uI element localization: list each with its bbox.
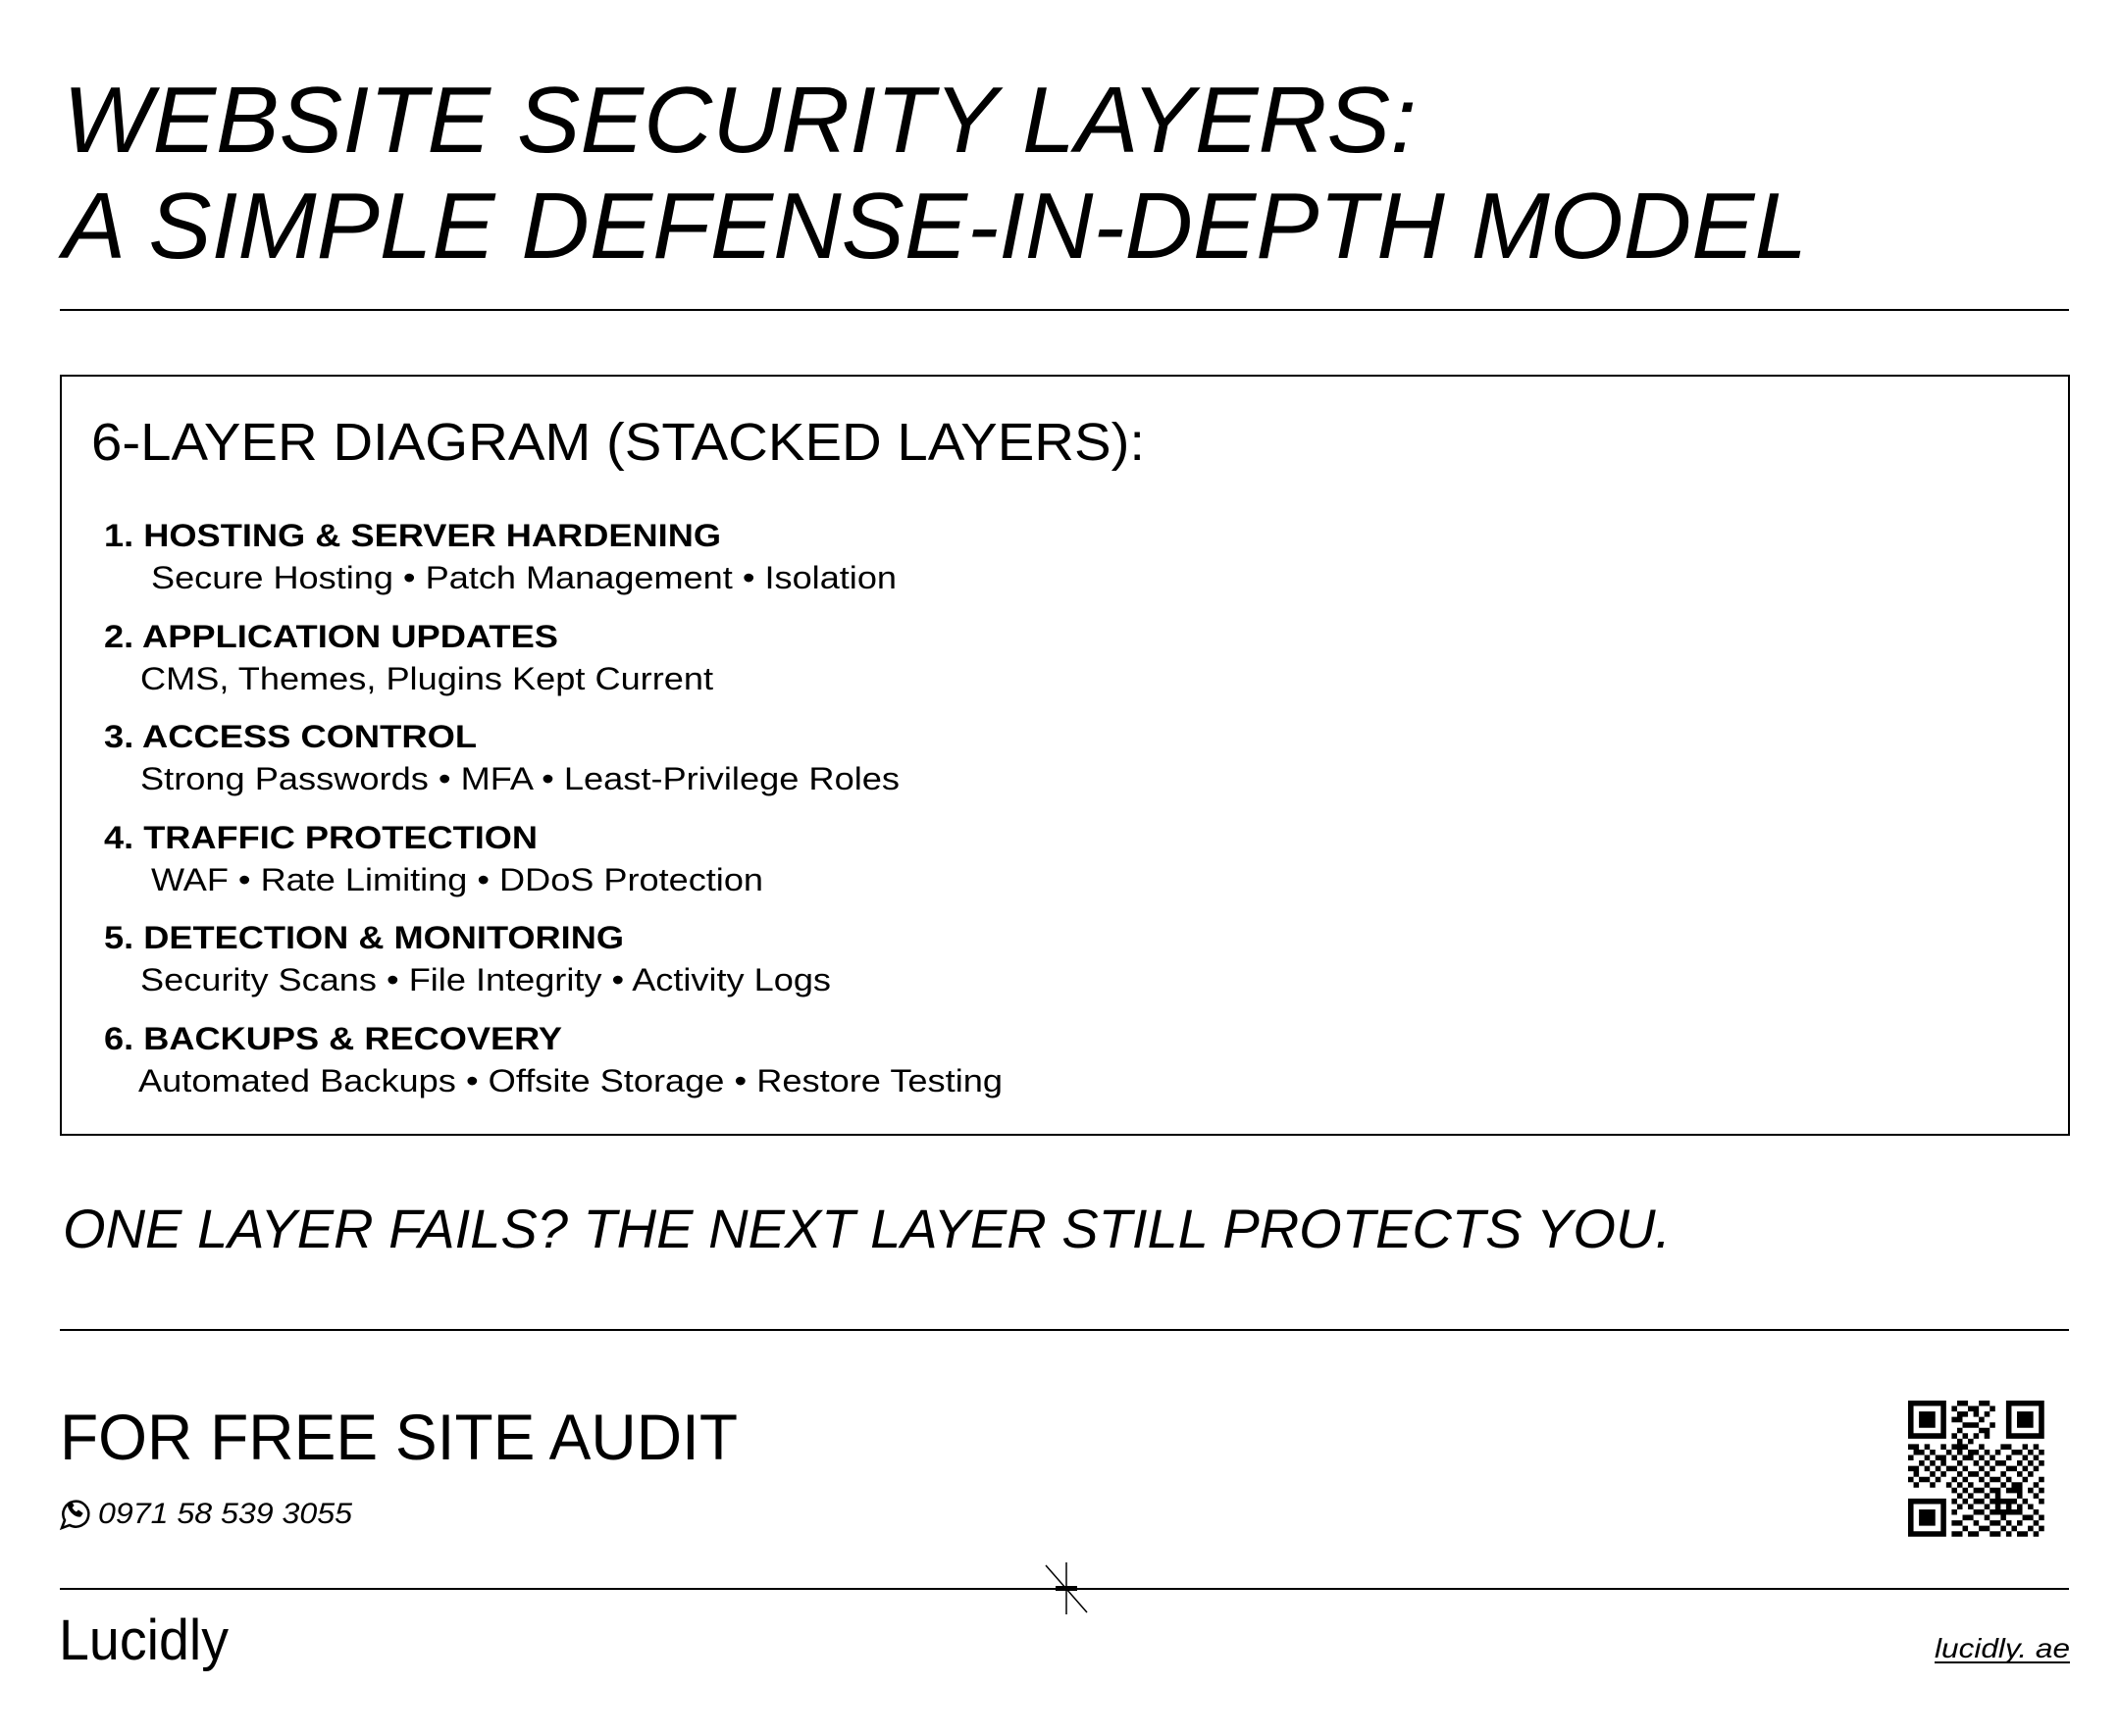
layer 6: 6. BACKUPS & RECOVERY [104, 1021, 562, 1056]
layer 4 [104, 820, 763, 897]
layer 5: 5. DETECTION & MONITORING [104, 920, 624, 955]
phone contact: 0971 58 539 3055 [98, 1498, 352, 1530]
layer 6 [104, 1021, 1003, 1098]
logo: Lucidly: Lucidly [59, 1608, 229, 1672]
icon: crosshair star [1046, 1562, 1087, 1614]
layer 3 [104, 719, 900, 796]
layer 5: Security Scans • File Integrity • Activity Logs [140, 962, 831, 997]
panel: 6-layer diagram [61, 376, 2069, 1135]
layer 1: Secure Hosting • Patch Management • Isolation [151, 560, 897, 595]
layer 1 [104, 518, 897, 595]
title: WEBSITE SECURITY LAYERS: [63, 68, 1417, 173]
layer 5 [104, 920, 831, 997]
QR code [1908, 1401, 2044, 1537]
layer 6: Automated Backups • Offsite Storage • Restore Testing [138, 1063, 1003, 1098]
layer 2: CMS, Themes, Plugins Kept Current [140, 661, 713, 696]
layer 2: 2. APPLICATION UPDATES [104, 619, 558, 654]
layer 1: 1. HOSTING & SERVER HARDENING [104, 518, 721, 553]
title [58, 68, 1807, 279]
layer 2 [104, 619, 713, 696]
title: A SIMPLE DEFENSE-IN-DEPTH MODEL [58, 174, 1807, 279]
tagline: ONE LAYER FAILS? THE NEXT LAYER STILL PROTECTS YOU. [63, 1198, 1671, 1259]
layer 3: Strong Passwords • MFA • Least-Privilege Roles [140, 761, 900, 796]
layer 3: 3. ACCESS CONTROL [104, 719, 477, 754]
layer 4: 4. TRAFFIC PROTECTION [104, 820, 538, 855]
website link: lucidly. ae [1935, 1633, 2070, 1663]
panel heading: 6-LAYER DIAGRAM (STACKED LAYERS): [91, 413, 1145, 472]
CTA heading: FOR FREE SITE AUDIT [60, 1401, 738, 1473]
icon: whatsapp [62, 1502, 88, 1528]
layer 4: WAF • Rate Limiting • DDoS Protection [151, 862, 763, 897]
